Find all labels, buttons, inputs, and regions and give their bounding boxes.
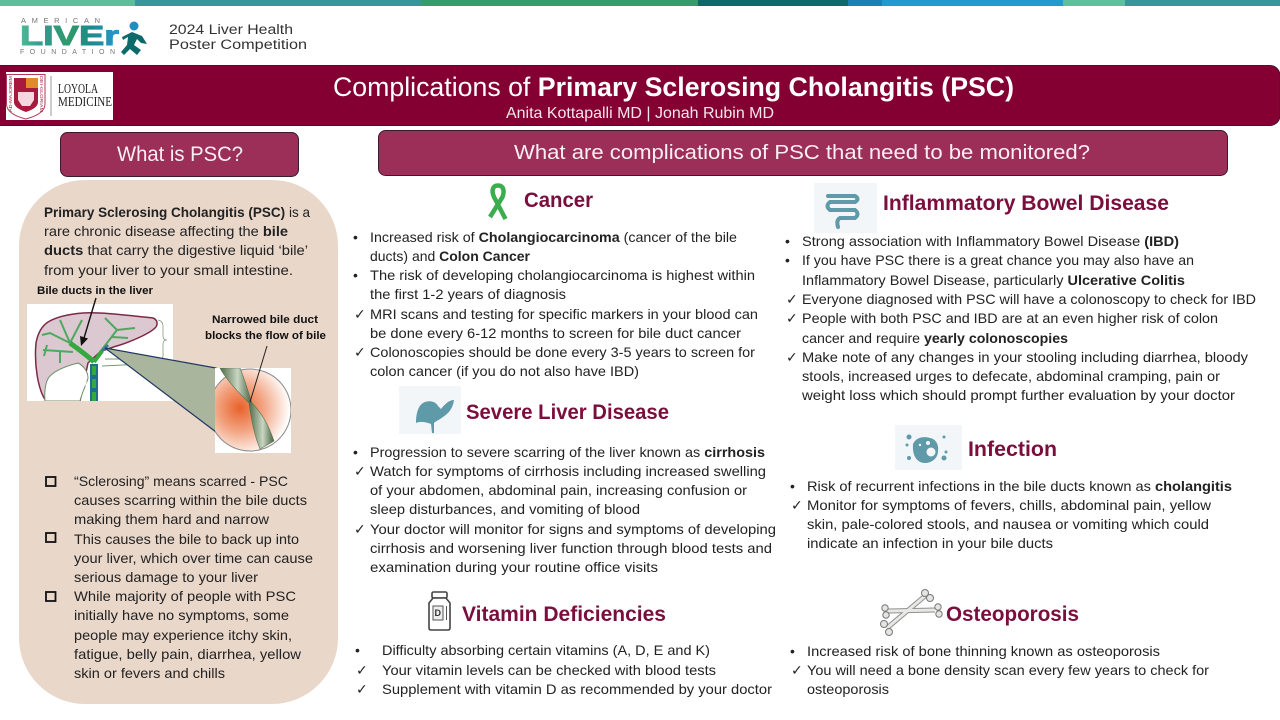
osteoporosis text: You will need a bone density scan every few years to check for (807, 662, 1209, 678)
severe liver disease text: examination during your routine office visits (370, 559, 658, 575)
competition label (169, 22, 307, 52)
heading: Vitamin Deficiencies (462, 603, 666, 626)
checklist: PSC facts: serious damage to your liver (74, 569, 258, 585)
severe liver disease text: sleep disturbances, and vomiting of blood (370, 501, 640, 517)
severe liver disease text: • (353, 444, 358, 460)
checklist: PSC facts: This causes the bile to back up into (74, 531, 299, 547)
cancer text: ✓ (354, 307, 366, 323)
severe liver disease text: ✓ (354, 522, 366, 538)
IBD text: Everyone diagnosed with PSC will have a colonoscopy to check for IBD (802, 291, 1256, 307)
intro paragraph: ducts that carry the digestive liquid ‘bile’ (44, 242, 308, 258)
osteoporosis text (790, 643, 1209, 697)
title banner (0, 66, 1280, 126)
pointer: narrowed duct (250, 346, 267, 402)
icon: crossed bones (880, 590, 942, 636)
vitamin text (355, 642, 772, 698)
severe liver disease text: Watch for symptoms of cirrhosis including increased swelling (370, 463, 766, 479)
severe liver disease text: cirrhosis and worsening liver function through blood tests and (370, 540, 772, 556)
IBD text: • (785, 233, 790, 249)
cancer text: • (353, 229, 358, 245)
icon: vitamin bottle (429, 592, 450, 630)
infection text: skin, pale-colored stools, and nausea or vomiting which could (807, 516, 1209, 532)
intro paragraph: Primary Sclerosing Cholangitis (PSC) is a (44, 204, 310, 220)
checklist: PSC facts: skin or fevers and chills (74, 665, 225, 681)
IBD text: cancer and require yearly colonoscopies (802, 330, 1068, 346)
vitamin text: Difficulty absorbing certain vitamins (A, D, E and K) (382, 642, 710, 658)
heading bar: complications: What are complications of PSC that need to be monitored? (514, 141, 1090, 164)
vitamin text: ✓ (356, 663, 368, 679)
IBD text: • (785, 252, 790, 268)
IBD text: Inflammatory Bowel Disease, particularly Ulcerative Colitis (802, 272, 1185, 288)
cancer text: MRI scans and testing for specific markers in your blood can (370, 306, 758, 322)
logo: Loyola Medicine (6, 72, 113, 120)
IBD text: ✓ (786, 292, 798, 308)
top colour stripe (0, 0, 1280, 6)
checklist: PSC facts: fatigue, belly pain, diarrhea, yellow (74, 646, 302, 662)
heading: Osteoporosis (946, 603, 1079, 626)
IBD text (785, 233, 1256, 403)
osteoporosis text: • (790, 643, 795, 659)
cancer text: ducts) and Colon Cancer (370, 248, 531, 264)
authors: Anita Kottapalli MD | Jonah Rubin MD (506, 105, 774, 122)
panel: what is PSC (19, 180, 338, 704)
severe liver disease text (353, 444, 776, 575)
checklist: PSC facts: “Sclerosing” means scarred - PSC (74, 473, 288, 489)
cancer text: Colonoscopies should be done every 3-5 years to screen for (370, 344, 755, 360)
IBD text: ✓ (786, 350, 798, 366)
label: narrowed duct: Narrowed bile duct (212, 314, 318, 326)
infection text: Risk of recurrent infections in the bile ducts known as cholangitis (807, 478, 1232, 494)
vitamin text: Supplement with vitamin D as recommended by your doctor (382, 681, 772, 697)
checklist: PSC facts: causes scarring within the bile ducts (74, 492, 307, 508)
infection text: indicate an infection in your bile ducts (807, 535, 1053, 551)
heading: Cancer (524, 189, 593, 212)
IBD text: weight loss which should prompt further evaluation by your doctor (801, 387, 1235, 403)
cancer text: ✓ (354, 345, 366, 361)
logo: American Liver Foundation: AMERICAN (21, 16, 100, 25)
severe liver disease text: of your abdomen, abdominal pain, increasing confusion or (370, 482, 747, 498)
icon: vitamin bottle: D (434, 608, 442, 618)
checklist: PSC facts (46, 473, 313, 681)
IBD text: stools, increased urges to defecate, abdominal cramping, pain or (802, 368, 1220, 384)
vitamin text: Your vitamin levels can be checked with blood tests (382, 662, 716, 678)
IBD text: People with both PSC and IBD are at an even higher risk of colon (802, 310, 1218, 326)
checklist: PSC facts: people may experience itchy skin, (74, 627, 292, 643)
logo: Loyola Medicine: AD-MAJOREM (8, 76, 13, 112)
infection text: Monitor for symptoms of fevers, chills, abdominal pain, yellow (807, 497, 1212, 513)
cancer text: The risk of developing cholangiocarcinoma is highest within (370, 267, 755, 283)
section: severe liver disease (353, 386, 776, 575)
severe liver disease text: Progression to severe scarring of the liver known as cirrhosis (370, 444, 765, 460)
competition label: 2024 Liver Health (169, 22, 293, 37)
magnified bile duct (105, 348, 291, 453)
logo: American Liver Foundation: FOUNDATION (20, 49, 115, 56)
logo: Loyola Medicine: MEDICINE (58, 94, 112, 109)
IBD text: Make note of any changes in your stooling including diarrhea, bloody (802, 349, 1248, 365)
cancer text: • (353, 267, 358, 283)
cancer text (353, 229, 758, 379)
section: osteoporosis (790, 590, 1209, 697)
arrow: bile ducts (80, 298, 96, 346)
heading bar: What is PSC: What is PSC? (117, 143, 243, 166)
infection text: • (790, 478, 795, 494)
logo: American Liver Foundation (20, 16, 147, 56)
vitamin text: • (355, 642, 360, 658)
osteoporosis text: ✓ (791, 663, 803, 679)
heading: Inflammatory Bowel Disease (883, 192, 1169, 215)
label: narrowed duct: blocks the flow of bile (205, 330, 326, 342)
section: inflammatory bowel disease (785, 183, 1256, 403)
checklist: PSC facts: While majority of people with PSC (74, 588, 296, 604)
cancer text: the first 1-2 years of diagnosis (370, 286, 566, 302)
severe liver disease text: Your doctor will monitor for signs and symptoms of developing (370, 521, 776, 537)
icon: green ribbon (490, 186, 506, 219)
IBD text: ✓ (786, 311, 798, 327)
cancer text: Increased risk of Cholangiocarcinoma (cancer of the bile (370, 229, 737, 245)
cancer text: colon cancer (if you do not also have IBD) (370, 363, 639, 379)
checklist: PSC facts: initially have no symptoms, some (74, 607, 289, 623)
heading bar: What is PSC (60, 132, 298, 176)
title: Complications of Primary Sclerosing Cholangitis (PSC) (333, 72, 1014, 102)
intro paragraph: rare chronic disease affecting the bile (44, 223, 288, 239)
intro paragraph: from your liver to your small intestine. (44, 262, 293, 278)
logo: American Liver Foundation: LIVEr (20, 20, 119, 51)
IBD text: If you have PSC there is a great chance you may also have an (802, 252, 1194, 268)
checklist: PSC facts: making them hard and narrow (74, 511, 270, 527)
section: infection (790, 425, 1232, 551)
IBD text: Strong association with Inflammatory Bowel Disease (IBD) (802, 233, 1179, 249)
logo: Loyola Medicine: LOYOLA (58, 81, 98, 96)
heading: Severe Liver Disease (466, 401, 669, 424)
icon: intestine (814, 183, 877, 233)
heading bar: complications (378, 130, 1228, 176)
intro paragraph (44, 204, 310, 278)
infection text: ✓ (791, 498, 803, 514)
label: narrowed duct (205, 314, 326, 342)
competition label: Poster Competition (169, 37, 307, 52)
osteoporosis text: osteoporosis (807, 681, 889, 697)
osteoporosis text: Increased risk of bone thinning known as osteoporosis (807, 643, 1160, 659)
heading: Infection (968, 438, 1057, 461)
liver diagram (27, 304, 173, 401)
infection text (790, 478, 1232, 551)
icon: liver (399, 386, 461, 434)
section: vitamin deficiencies (355, 592, 772, 698)
cancer text: be done every 6-12 months to screen for bile duct cancer (370, 325, 741, 341)
section: cancer (353, 186, 758, 379)
label: bile ducts: Bile ducts in the liver (37, 285, 154, 297)
logo: Loyola Medicine: DEI-GLORIAM (39, 76, 44, 112)
icon: bacteria (895, 425, 962, 470)
vitamin text: ✓ (356, 682, 368, 698)
checklist: PSC facts: your liver, which over time can cause (74, 550, 313, 566)
severe liver disease text: ✓ (354, 464, 366, 480)
